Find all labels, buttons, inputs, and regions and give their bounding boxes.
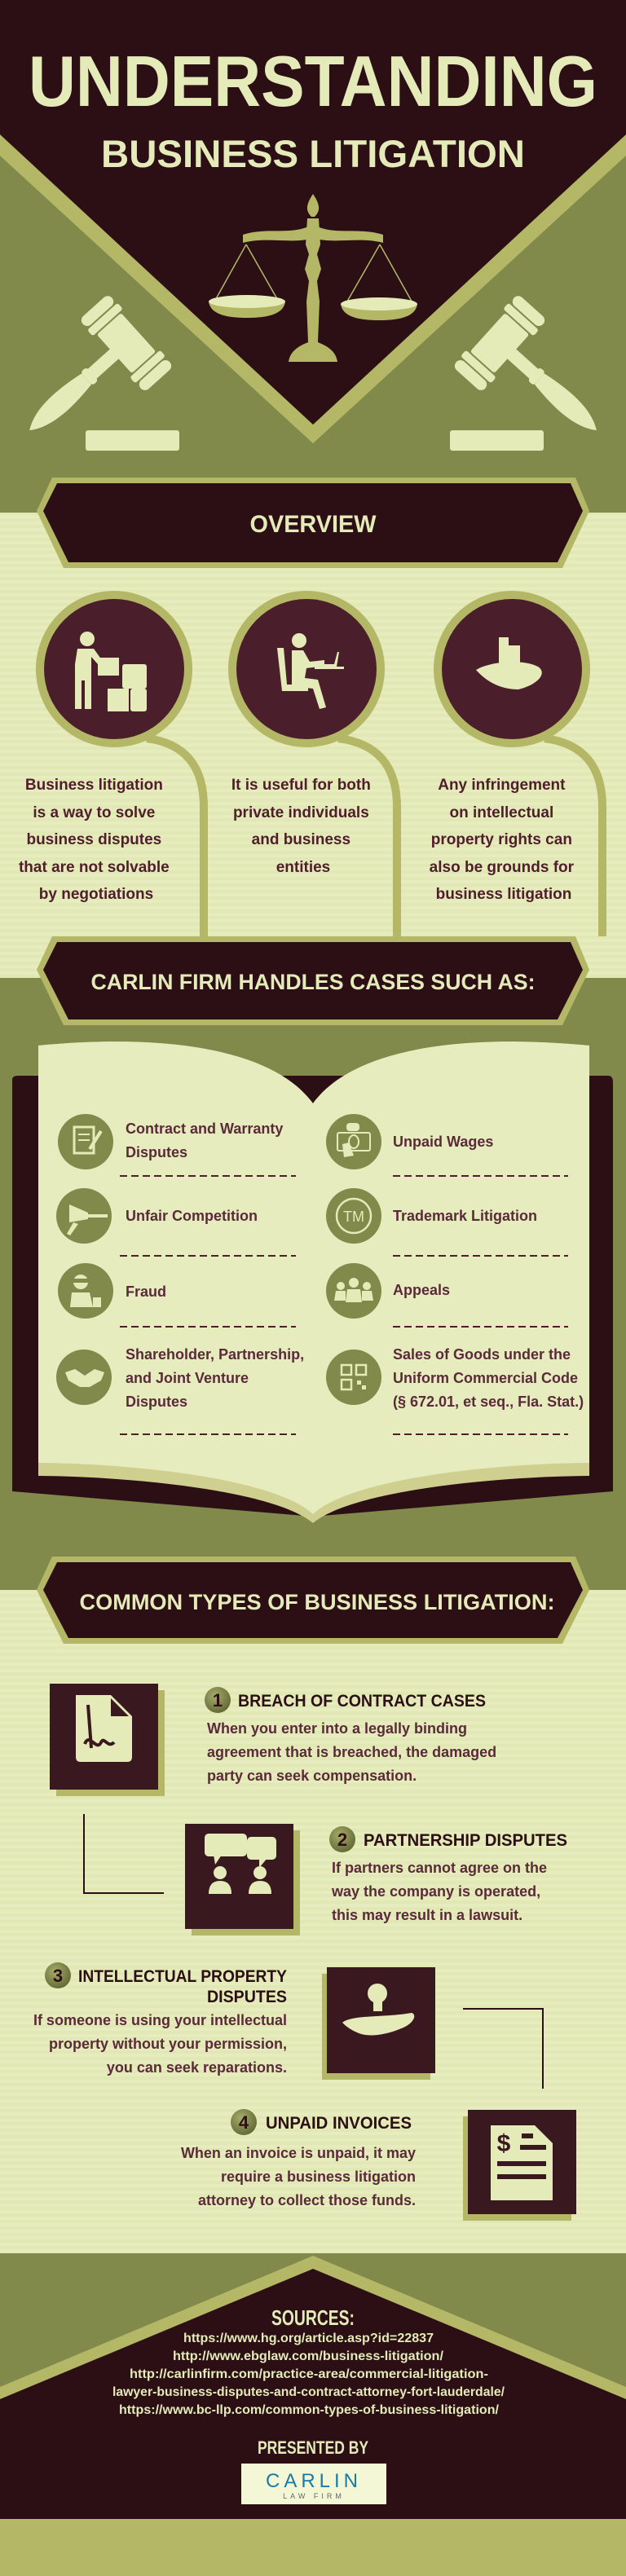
panel: book of cases: Trademark Litigation [393,1208,537,1224]
panel: book of cases: Unfair Competition [126,1208,258,1224]
panel: overview item 3: Any infringement [438,777,566,794]
panel: overview item 1 [19,591,204,936]
panel: overview item 3: business litigation [436,886,571,903]
icon: scales of justice [209,194,417,362]
panel: book of cases [12,1041,613,1523]
icon: person with puzzle [75,632,147,711]
panel: overview item 3 [430,591,602,936]
panel: book of cases: Disputes [126,1394,187,1410]
panel: unpaid invoices: UNPAID INVOICES [266,2114,412,2133]
panel: overview item 1: business disputes [26,831,161,848]
title [29,41,597,175]
arrow: connector 1 [84,1814,164,1893]
icon: unfair competition [56,1188,112,1244]
icon: trademark: TM [343,1209,364,1225]
icon: trademark [326,1188,381,1244]
icon: left gavel [0,293,179,467]
panel: book of cases: (§ 672.01, et seq., Fla. Stat.) [393,1394,584,1410]
text block: sources: http://carlinfirm.com/practice-area/commercial-litigation- [130,2367,488,2381]
panel: partnership disputes: PARTNERSHIP DISPUTES [364,1831,567,1850]
panel: book of cases: Disputes [126,1144,187,1160]
text block: sources: SOURCES: [271,2305,355,2330]
panel: book of cases: Unpaid Wages [393,1134,493,1150]
heading: overview banner [37,478,589,568]
panel: overview item 3: property rights can [431,831,572,848]
panel: overview item 1: is a way to solve [33,804,155,821]
logo: carlin law firm [241,2464,386,2504]
panel: overview item 2: and business [252,831,350,848]
icon: hand holding building [476,637,542,689]
icon: signed document [76,1695,132,1762]
panel: partnership disputes: way the company is operated, [331,1883,540,1900]
panel: breach of contract [50,1684,496,1796]
panel: overview item 2: It is useful for both [231,777,371,794]
panel: breach of contract: agreement that is breached, the damaged [207,1744,496,1760]
icon: person at laptop [277,633,344,709]
panel: unpaid invoices: attorney to collect those funds. [198,2192,416,2208]
text block: presented by: PRESENTED BY [258,2437,368,2458]
icon: handshake [56,1350,112,1405]
panel: unpaid invoices: When an invoice is unpaid, it may [181,2145,416,2161]
icon: two people talking [205,1834,276,1894]
text block: sources: lawyer-business-disputes-and-contract-attorney-fort-lauderdale/ [112,2385,505,2399]
icon: invoice [491,2125,553,2200]
panel: unpaid invoices [181,2109,576,2221]
panel: intellectual property: If someone is using your intellectual [33,2012,287,2028]
panel: unpaid invoices: require a business litigation [221,2169,416,2185]
title: BUSINESS LITIGATION [101,132,525,175]
panel: overview item 3: on intellectual [449,804,553,821]
panel: overview item 1: that are not solvable [19,859,170,876]
icon: fraud [58,1263,113,1319]
heading: common types banner: COMMON TYPES OF BUSINESS LITIGATION: [80,1590,554,1614]
icon: hand with lightbulb [342,1984,414,2035]
header dark V [0,0,626,443]
panel: overview item 1: by negotiations [39,886,153,903]
icon: invoice: $ [497,2130,511,2157]
logo: carlin law firm: CARLIN [266,2470,362,2492]
panel: overview item 2: private individuals [233,804,369,821]
text block: sources: https://www.hg.org/article.asp?id=22837 [183,2332,434,2345]
panel: intellectual property: you can seek reparations. [107,2059,287,2076]
panel: book of cases: Sales of Goods under the [393,1346,571,1363]
panel: intellectual property: property without your permission, [49,2036,287,2052]
text block: sources [112,2305,508,2417]
panel: intellectual property [33,1962,435,2080]
panel: overview item 2 [228,591,397,936]
heading: carlin firm banner: CARLIN FIRM HANDLES CASES SUCH AS: [91,970,535,994]
panel: partnership disputes: this may result in a lawsuit. [332,1907,522,1923]
panel: breach of contract: When you enter into a legally binding [207,1720,467,1737]
panel: partnership disputes [185,1824,567,1935]
panel: intellectual property: DISPUTES [207,1988,287,2006]
heading: common types banner [37,1557,589,1644]
panel: book of cases: and Joint Venture [126,1370,249,1386]
icon: unpaid wages [326,1114,381,1169]
panel: book of cases: Uniform Commercial Code [393,1370,578,1386]
panel: book of cases: Contract and Warranty [126,1121,283,1137]
panel: intellectual property: INTELLECTUAL PROPERTY [78,1967,287,1986]
text block: sources: http://www.ebglaw.com/business-litigation/ [173,2349,444,2363]
icon: right gavel [450,293,626,467]
text block: sources: https://www.bc-llp.com/common-types-of-business-litigation/ [119,2403,500,2417]
panel: book of cases: Appeals [393,1282,450,1298]
panel: intellectual property: 3 [53,1966,63,1986]
panel: breach of contract: 1 [213,1690,223,1711]
panel: partnership disputes: If partners cannot agree on the [332,1860,547,1876]
panel: book of cases: Shareholder, Partnership, [126,1346,304,1363]
arrow: connector 2 [463,2009,543,2089]
panel: overview item 2: entities [276,859,330,876]
panel: unpaid invoices: 4 [239,2112,249,2133]
panel: partnership disputes: 2 [337,1830,347,1850]
panel: breach of contract: BREACH OF CONTRACT CASES [238,1692,486,1711]
panel: overview item 3: also be grounds for [430,859,575,876]
logo: carlin law firm: LAW FIRM [283,2492,345,2500]
icon: contract [58,1114,113,1169]
footer triangle [0,2256,626,2576]
panel: overview item 1: Business litigation [25,777,163,794]
icon: qr code [326,1350,381,1405]
heading: carlin firm banner [37,936,589,1025]
panel: book of cases: Fraud [126,1284,166,1300]
heading: overview banner: OVERVIEW [249,511,377,538]
panel: breach of contract: party can seek compensation. [207,1768,417,1784]
icon: appeals [326,1263,381,1319]
